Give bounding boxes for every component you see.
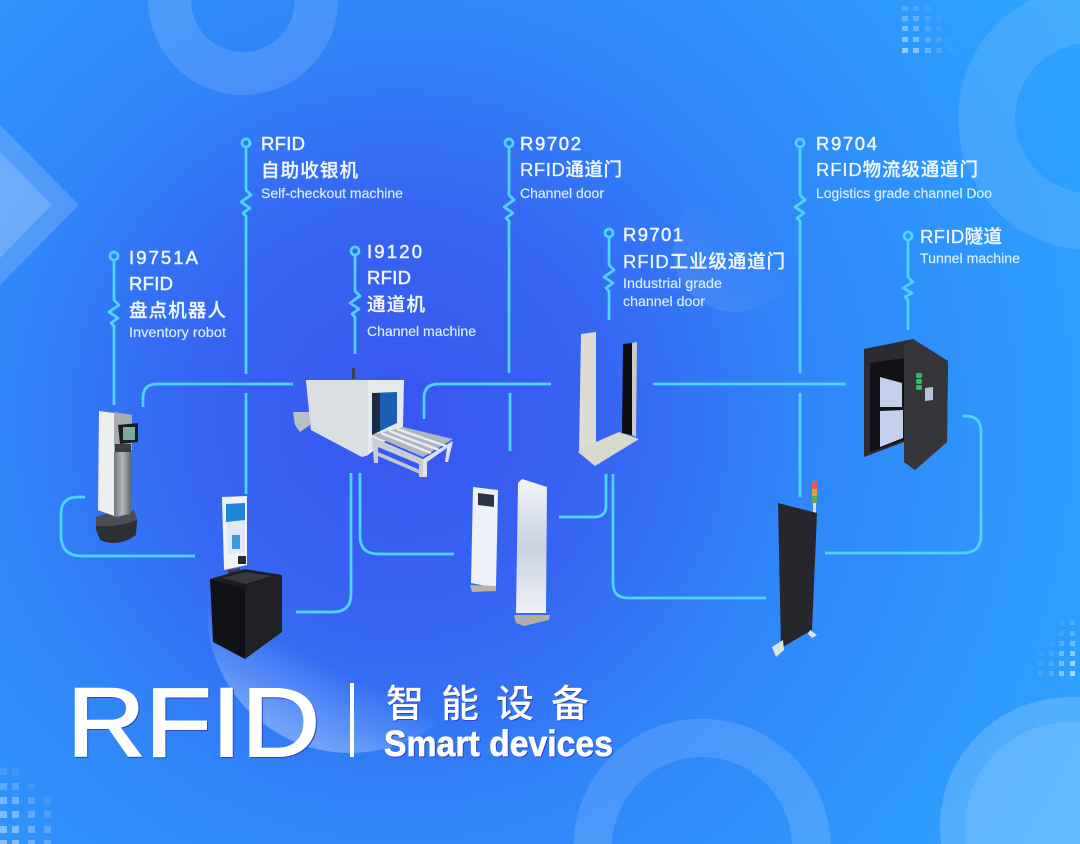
device: black channel door with beacon [772, 481, 817, 657]
callout: I9751A inventory robot [109, 247, 226, 405]
callout: I9751A inventory robot: 盘点机器人 [129, 300, 226, 321]
callout: tunnel machine [903, 226, 1020, 330]
device: I9120 channel machine [293, 368, 453, 477]
decor: dot grid bottom right [1038, 620, 1075, 676]
callout: R9704 logistics channel door: Logistics grade channel Doo [816, 185, 992, 201]
decor: dot grid top right [902, 6, 953, 53]
callout: self-checkout machine: Self-checkout machine [261, 185, 403, 201]
title divider [350, 683, 354, 757]
decor: large soft circle [207, 467, 493, 753]
title: English: Smart devices [384, 723, 613, 764]
decor: bottom centre ring [574, 719, 830, 844]
callout: R9704 logistics channel door: RFID物流级通道门 [816, 159, 978, 180]
callout: self-checkout machine: 自助收银机 [261, 160, 358, 181]
callout: self-checkout machine [241, 133, 403, 374]
decor: left arrow [0, 125, 79, 285]
callout: R9701 industrial channel door: Industrial grade [623, 275, 722, 291]
decor: top ring [148, 0, 338, 95]
callout: I9120 channel machine: Channel machine [367, 323, 476, 339]
callout: I9120 channel machine [350, 241, 476, 354]
callout: I9120 channel machine: I9120 [367, 241, 422, 262]
callout: R9702 channel door [504, 133, 622, 373]
decor: dot grid bottom left [0, 768, 51, 844]
title: Chinese: 智能设备 [386, 684, 606, 726]
callout: I9120 channel machine: RFID [367, 267, 411, 288]
callout: I9751A inventory robot: RFID [129, 273, 173, 294]
callout: R9701 industrial channel door: channel door [623, 293, 705, 309]
callout: R9702 channel door: R9702 [520, 133, 581, 154]
device: self-checkout kiosk [210, 496, 282, 659]
callout: I9751A inventory robot: I9751A [129, 247, 199, 268]
callout: R9701 industrial channel door: R9701 [623, 224, 683, 245]
callout: R9701 industrial channel door [604, 224, 785, 320]
callout: tunnel machine: Tunnel machine [920, 250, 1020, 266]
callout: I9751A inventory robot: Inventory robot [129, 324, 226, 340]
device: tunnel machine [864, 339, 948, 470]
callout: R9701 industrial channel door: RFID工业级通道门 [623, 251, 785, 272]
decor: bottom right circles [940, 697, 1080, 844]
title: RFID: RFID [67, 668, 320, 777]
device: R9702 channel door pair [470, 479, 550, 626]
callout: R9702 channel door: RFID通道门 [520, 159, 622, 180]
connector lines [61, 384, 981, 612]
device: R9701 channel door [578, 332, 639, 466]
decor: faint circle [673, 188, 797, 312]
device: inventory robot [96, 411, 138, 543]
callout: self-checkout machine: RFID [261, 133, 305, 154]
callout: I9120 channel machine: 通道机 [367, 294, 425, 315]
decor: right ring [958, 0, 1080, 250]
callout: R9704 logistics channel door [795, 133, 992, 373]
callout: R9704 logistics channel door: R9704 [816, 133, 877, 154]
callout: tunnel machine: RFID隧道 [920, 226, 1002, 247]
callout: R9702 channel door: Channel door [520, 185, 604, 201]
